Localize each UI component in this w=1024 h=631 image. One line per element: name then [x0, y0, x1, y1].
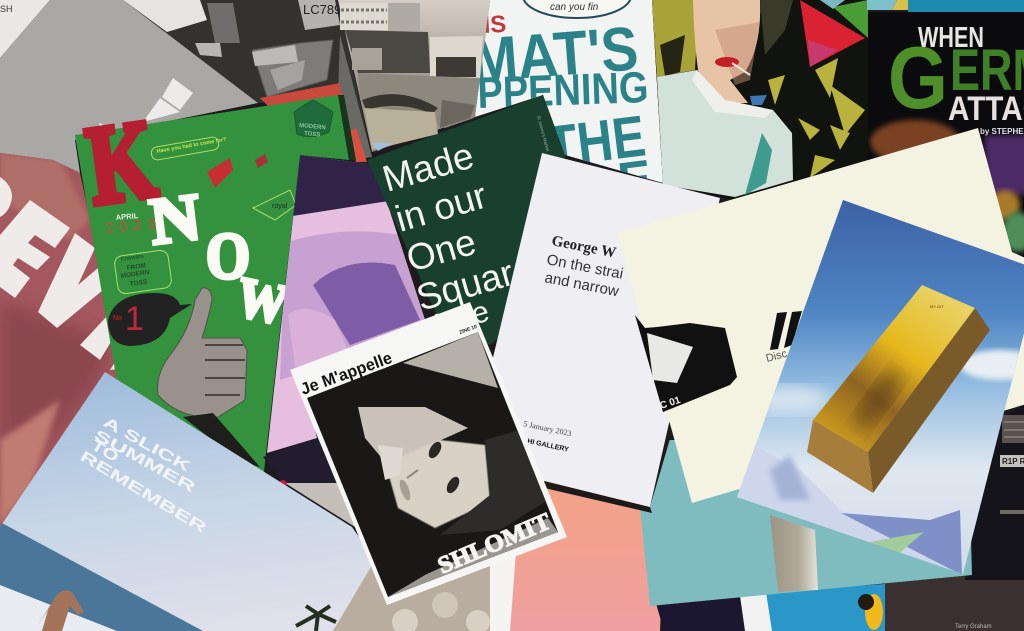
panel: sepia building photo magazine	[338, 0, 490, 152]
palm tree	[296, 606, 336, 631]
cover headline	[77, 414, 209, 537]
panel: green Know magazine: 2023	[105, 216, 156, 237]
speech bubble	[523, 0, 631, 18]
panel: white magazine with teal headline	[475, 0, 663, 183]
panel: When Germs Attack dark magazine	[868, 12, 1024, 270]
speech bubble: Have you had to come for?	[156, 137, 228, 155]
gold bar	[807, 285, 990, 493]
number one bubble: No	[113, 315, 122, 322]
panel: black and white ship photo magazine: LC7898	[303, 2, 349, 17]
panel: cream magazine: Disc	[765, 348, 789, 365]
letters on red cover	[0, 177, 118, 370]
panel: pale blue gold bar magazine	[737, 200, 1024, 575]
panel: top-left white magazine	[0, 0, 50, 58]
panel: Je M'appelle zine: Je M'appelle	[298, 349, 395, 399]
panel: white magazine with teal headline: IS	[483, 11, 507, 39]
headline text: Made	[378, 135, 478, 200]
panel: navy and pale magazine scraps under the pink cover	[263, 437, 355, 527]
panel: cookies photo magazine	[333, 540, 490, 631]
panel: green Know magazine: APRIL	[115, 211, 139, 222]
panel: white George magazine: HI GALLERY	[527, 438, 570, 454]
cover headline: A SLICK	[100, 414, 193, 476]
crown logo: MODERN	[299, 123, 326, 131]
panel: white George magazine	[468, 153, 720, 513]
headline: THE	[544, 103, 649, 180]
panel: white George magazine: George W	[550, 233, 617, 261]
letter K: K	[80, 97, 163, 229]
headline: MAT'S	[469, 14, 641, 96]
cover headline: TO	[88, 437, 122, 466]
white word Now: N	[146, 180, 204, 259]
Knowtes stamp: FROM	[126, 262, 146, 272]
panel: white George magazine: and narrow	[543, 269, 620, 300]
headline: OE	[576, 150, 655, 216]
speech bubble: can you fin	[550, 2, 599, 13]
panel: pink abstract magazine	[267, 150, 430, 453]
gold bar: MY GIT	[930, 304, 944, 309]
panel: top-left white magazine: SH	[0, 4, 13, 14]
number one bubble: 1	[125, 300, 144, 338]
panel: cream magazine	[617, 128, 1024, 503]
swimmer figure	[38, 590, 84, 631]
crown logo	[294, 100, 333, 138]
racing car illustration	[635, 315, 737, 412]
headline: PPENING	[477, 63, 649, 118]
panel: green Know magazine: royal	[272, 203, 288, 210]
cover headline: REMEMBER	[77, 448, 209, 537]
panel: A Slick Summer To Remember magazine	[0, 372, 375, 631]
panel: green Know magazine	[75, 95, 356, 480]
title text: WHEN	[918, 22, 984, 54]
panel: Je M'appelle zine	[290, 302, 567, 605]
panel: dark green Made in our One Square Mile magazine	[367, 95, 565, 345]
panel: woman on leaves magazine	[652, 0, 1024, 200]
white word Now: W	[231, 266, 293, 337]
Knowtes stamp: Knowtes	[120, 254, 144, 263]
panel: white George magazine: On the strai	[545, 251, 625, 283]
Knowtes stamp: MODERN	[120, 269, 150, 280]
panel: When Germs Attack dark magazine: G	[888, 28, 948, 127]
thumbs up hand	[158, 288, 260, 467]
panel: Je M'appelle zine: ZINE 10	[459, 324, 478, 336]
white word Now	[146, 180, 293, 337]
panel: bottom background layers: Terry Graham	[955, 624, 992, 630]
panel: teal magazine	[640, 440, 972, 606]
logo mark	[770, 311, 802, 350]
panel: white George magazine: 5 January 2023	[523, 419, 572, 438]
Knowtes stamp: TOSS	[129, 279, 148, 288]
panel: red landscape magazine with large letters	[0, 153, 116, 527]
panel: dark green Made in our One Square Mile magazine: St James's Market	[536, 115, 551, 153]
headline	[480, 27, 647, 178]
cover headline: SUMMER	[91, 427, 198, 496]
headline text: in our	[391, 175, 491, 240]
panel: grey magazine	[0, 0, 258, 173]
headline text	[378, 135, 518, 342]
headline text: Squar	[412, 252, 518, 319]
panel: black and white ship photo magazine	[123, 0, 373, 162]
headline text: Mile	[431, 295, 493, 342]
Knowtes stamp	[114, 249, 172, 295]
number one bubble	[108, 293, 192, 346]
crown logo: TOSS	[304, 131, 321, 138]
headline text: One	[402, 221, 480, 280]
panel: Je M'appelle zine: SHLOMIT	[434, 509, 555, 580]
speech bubble	[150, 136, 228, 161]
white word Now: O	[206, 220, 250, 293]
fur strip	[770, 515, 818, 592]
racing car illustration: C 01	[659, 395, 682, 412]
